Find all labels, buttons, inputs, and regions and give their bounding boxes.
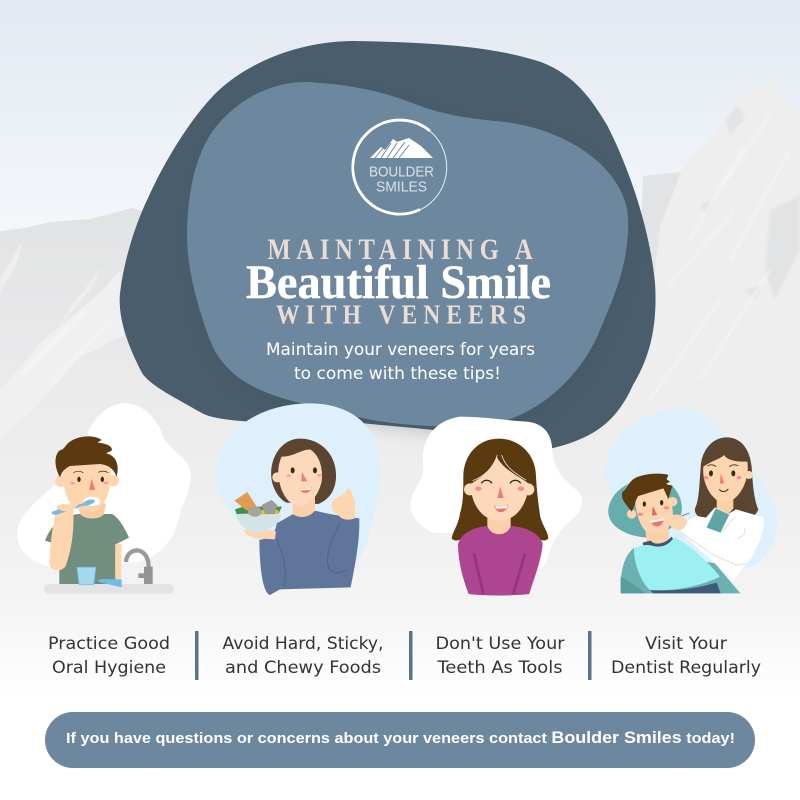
mouth [84, 497, 100, 506]
tip label: dentist: Dentist Regularly [611, 658, 761, 677]
neck [77, 503, 106, 518]
dentist face [703, 455, 748, 503]
raised arm [49, 504, 73, 570]
sweater [259, 511, 359, 595]
patient features [643, 501, 646, 507]
icon: bowl of food [234, 492, 282, 533]
neck [487, 513, 511, 534]
hand [244, 530, 276, 539]
face [63, 463, 111, 512]
eyes and nose [77, 477, 81, 482]
neck [293, 497, 315, 517]
dentist neck [717, 498, 733, 514]
dentist coat [680, 507, 764, 581]
title [246, 233, 551, 330]
patient collar [643, 537, 675, 548]
tip label: teeth as tools: Don't Use Your [436, 634, 565, 653]
ears [55, 476, 66, 487]
logo: Boulder Smiles [353, 120, 447, 214]
icon: glass [77, 567, 96, 585]
illustration: brushing teeth [17, 403, 191, 594]
dental chair [621, 548, 741, 593]
icon: toothbrush [52, 500, 95, 515]
logo: Boulder Smiles: SMILES [376, 178, 427, 196]
icon: toothpaste [97, 579, 122, 587]
patient bib [634, 537, 720, 590]
tip label: foods: Avoid Hard, Sticky, [222, 634, 384, 653]
sink [44, 584, 174, 594]
tip label: foods: and Chewy Foods [225, 658, 381, 677]
title: WITH VENEERS [276, 298, 532, 330]
mouth [494, 504, 508, 512]
icon: faucet [126, 550, 153, 584]
tip label: teeth as tools [436, 634, 565, 677]
tip label: dentist: Visit Your [645, 634, 727, 653]
hair [271, 439, 336, 504]
title: Beautiful Smile [246, 256, 551, 309]
illustration: smiling woman [410, 417, 582, 595]
mouth [299, 487, 312, 493]
dentist hair [695, 437, 758, 518]
patient ears [627, 509, 636, 519]
tip label: oral hygiene: Practice Good [48, 634, 170, 653]
call to action banner: If you have questions or concerns about your veneers contact Boulder Smiles today! [66, 729, 735, 747]
subtitle: Maintain your veneers for years [266, 340, 535, 359]
dark blob panel [120, 41, 656, 450]
icon: mountains [370, 138, 433, 158]
illustration: healthy food [216, 403, 380, 595]
tip label: oral hygiene [48, 634, 170, 677]
panel shadow [192, 89, 633, 438]
tip label: foods [222, 634, 384, 677]
hair [452, 439, 548, 540]
shirt [45, 514, 129, 584]
subtitle [266, 340, 535, 383]
illustration: dentist visit [605, 408, 777, 593]
dentist sleeve [680, 521, 759, 565]
patient neck [645, 527, 669, 545]
tip label: teeth as tools: Teeth As Tools [436, 658, 562, 677]
blue blob [605, 408, 777, 571]
thumbs up [332, 488, 355, 520]
call to action banner [45, 712, 755, 768]
patient hair [622, 474, 672, 512]
subtitle: to come with these tips! [294, 364, 501, 383]
patient face [635, 485, 673, 533]
ears [464, 483, 476, 495]
tip label: oral hygiene: Oral Hygiene [52, 658, 166, 677]
face [278, 449, 322, 507]
hair [55, 436, 118, 477]
eyes [481, 480, 521, 483]
dentist hand and tool [667, 514, 688, 530]
face [471, 457, 528, 521]
dental chair headrest [608, 483, 682, 537]
sweater [458, 526, 543, 595]
logo: Boulder Smiles: BOULDER [369, 164, 434, 180]
tip label: dentist [611, 634, 761, 677]
title: MAINTAINING A [268, 233, 538, 266]
dentist scrub [707, 508, 729, 535]
light blob panel [187, 82, 628, 427]
